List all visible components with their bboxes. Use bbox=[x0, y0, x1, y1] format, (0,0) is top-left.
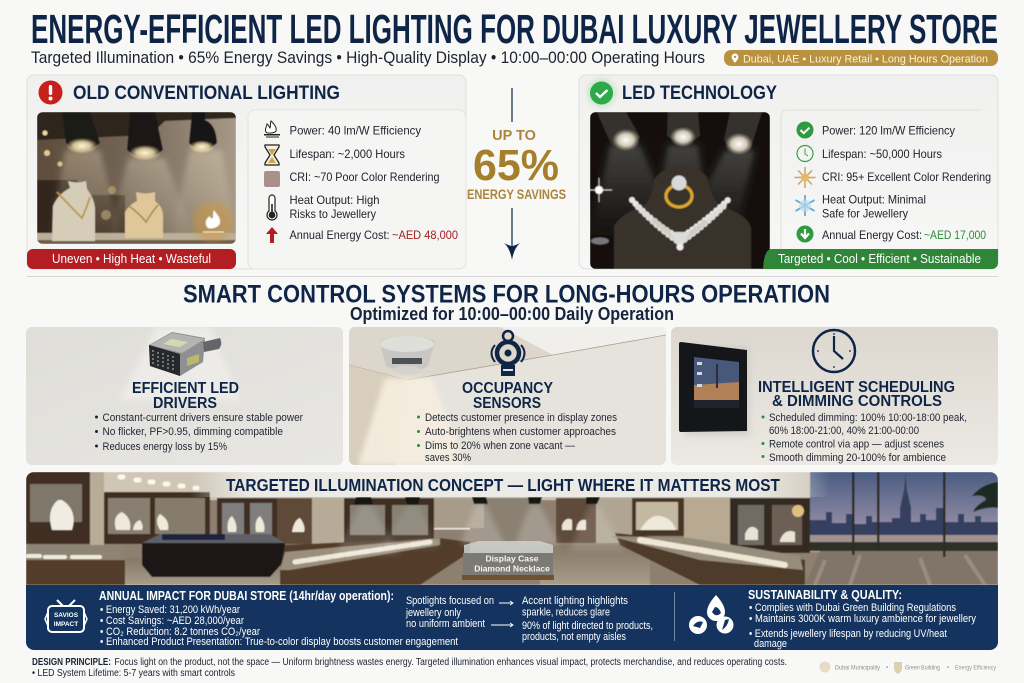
bullets: Scheduled dimming: 100% 10:00-18:00 peak, bbox=[769, 412, 967, 424]
heat output bbox=[822, 192, 926, 220]
annual cost bbox=[290, 228, 458, 242]
savings callout: UP TO bbox=[492, 128, 536, 144]
icon: savings impact badge bbox=[45, 600, 87, 632]
arrows bbox=[491, 601, 513, 627]
sustainability list: SUSTAINABILITY & QUALITY: bbox=[748, 587, 902, 602]
annual cost: Annual Energy Cost: bbox=[290, 228, 390, 242]
card: efficient LED drivers bbox=[26, 327, 343, 465]
icon: thermometer bbox=[267, 195, 277, 220]
lifespan: Lifespan: ~2,000 Hours bbox=[290, 147, 405, 161]
annual cost: Annual Energy Cost: bbox=[822, 228, 922, 242]
panel: old conventional lighting bbox=[27, 75, 466, 269]
icon: snowflake bbox=[796, 195, 814, 216]
icon: ceiling sensor bbox=[380, 336, 435, 374]
lifespan: Lifespan: ~50,000 Hours bbox=[822, 147, 942, 161]
spotlight note: jewellery only bbox=[405, 607, 461, 619]
status band: Targeted • Cool • Efficient • Sustainable bbox=[778, 252, 981, 266]
section heading: SMART CONTROL SYSTEMS FOR LONG-HOURS OPERATION bbox=[183, 280, 830, 308]
bullets bbox=[762, 412, 967, 464]
heat output: Safe for Jewellery bbox=[822, 206, 908, 220]
bullets bbox=[417, 412, 617, 464]
card: intelligent scheduling bbox=[671, 327, 998, 465]
certification logos: • bbox=[947, 664, 950, 672]
icon: savings impact badge: SAVIOS bbox=[54, 612, 79, 619]
bullets: Reduces energy loss by 15% bbox=[102, 441, 227, 453]
status band bbox=[27, 249, 236, 269]
icon: savings impact badge: IMPACT bbox=[54, 621, 78, 628]
heat output: Heat Output: High bbox=[290, 193, 380, 207]
annual cost: ~AED 48,000 bbox=[392, 228, 458, 242]
card title: SENSORS bbox=[473, 395, 541, 412]
icon: up arrow bbox=[266, 227, 278, 243]
accent note: products, not empty aisles bbox=[522, 631, 626, 643]
power: Power: 40 lm/W Efficiency bbox=[290, 124, 421, 138]
annual cost bbox=[822, 228, 986, 242]
location pill bbox=[724, 50, 998, 66]
accent note bbox=[522, 595, 653, 643]
icon: occupancy person bbox=[492, 331, 524, 376]
icon: colour swatch bbox=[264, 171, 280, 187]
card title: INTELLIGENT SCHEDULING bbox=[758, 379, 955, 396]
subtitle: Targeted Illumination • 65% Energy Savings • High-Quality Display • 10:00–00:00 Operating Hours bbox=[31, 49, 705, 67]
CRI: CRI: 95+ Excellent Color Rendering bbox=[822, 170, 991, 184]
design principle note: DESIGN PRINCIPLE: bbox=[32, 657, 111, 668]
bullets: saves 30% bbox=[425, 452, 471, 464]
photo: jewellery store interior bbox=[26, 472, 998, 585]
sustainability list: damage bbox=[754, 638, 787, 650]
bullets: Auto-brightens when customer approaches bbox=[425, 426, 616, 438]
bullets: 60% 18:00-21:00, 40% 21:00-00:00 bbox=[769, 425, 919, 437]
CRI: CRI: ~70 Poor Color Rendering bbox=[290, 170, 440, 184]
heading band: targeted illumination: TARGETED ILLUMINATION CONCEPT — LIGHT WHERE IT MATTERS MOST bbox=[226, 475, 780, 495]
spec list bbox=[781, 110, 991, 249]
sustainability list: • Complies with Dubai Green Building Regulations bbox=[749, 602, 956, 614]
annual impact list: • Enhanced Product Presentation: True-to-color display boosts customer engagement bbox=[100, 636, 458, 648]
spotlight note: no uniform ambient bbox=[406, 618, 485, 630]
spec list bbox=[248, 110, 466, 269]
bullets: Smooth dimming 20-100% for ambience bbox=[769, 452, 946, 464]
certification logos: Dubai Municipality bbox=[835, 664, 881, 672]
heading: LED TECHNOLOGY bbox=[622, 82, 777, 104]
bullets bbox=[95, 412, 303, 453]
card title: OCCUPANCY bbox=[462, 380, 554, 397]
card title bbox=[462, 380, 554, 412]
icon: flame bbox=[264, 121, 280, 138]
section subheading: Optimized for 10:00–00:00 Daily Operation bbox=[350, 304, 674, 324]
heading: OLD CONVENTIONAL LIGHTING bbox=[73, 82, 340, 104]
display case label bbox=[462, 541, 554, 580]
accent note: Accent lighting highlights bbox=[522, 595, 628, 607]
location pill: Dubai, UAE • Luxury Retail • Long Hours Operation bbox=[743, 54, 988, 66]
heat output bbox=[290, 193, 380, 221]
design principle note: • LED System Lifetime: 5-7 years with smart controls bbox=[32, 668, 235, 679]
icon: check bbox=[588, 79, 616, 107]
design principle note: Focus light on the product, not the space — Uniform brightness wastes energy. Targeted illumination enhances visual impact, protects merchandise, and reduces operating costs. bbox=[114, 657, 787, 668]
accent note: sparkle, reduces glare bbox=[522, 606, 610, 618]
design principle note bbox=[32, 657, 787, 679]
icon: hourglass bbox=[265, 145, 279, 165]
certification logos: • bbox=[886, 664, 889, 672]
sustainability list: • Extends jewellery lifespan by reducing UV/heat bbox=[749, 628, 947, 640]
annual impact list: • Cost Savings: ~AED 28,000/year bbox=[100, 615, 244, 627]
icon: clock bbox=[797, 146, 813, 162]
icon: LED driver bbox=[149, 332, 221, 376]
annual cost: ~AED 17,000 bbox=[924, 228, 986, 242]
bullets: Constant-current drivers ensure stable power bbox=[102, 412, 303, 424]
annual impact list: • Energy Saved: 31,200 kWh/year bbox=[100, 604, 240, 616]
icon: sparkle bbox=[794, 167, 816, 188]
sustainability list bbox=[748, 587, 976, 650]
spotlight note: Spotlights focused on bbox=[406, 595, 494, 607]
card title: & DIMMING CONTROLS bbox=[772, 393, 942, 410]
panel: LED technology bbox=[579, 75, 998, 269]
status band bbox=[763, 249, 998, 269]
savings callout bbox=[467, 88, 566, 260]
icon: sustainability drops bbox=[689, 595, 734, 634]
photo: LED spotlights on diamond necklace bbox=[586, 112, 770, 269]
annual impact list bbox=[99, 588, 458, 648]
certification logos: Energy Efficiency bbox=[955, 664, 997, 672]
icon: warning bbox=[38, 80, 62, 104]
panel: annual impact band bbox=[26, 585, 998, 650]
annual impact list: ANNUAL IMPACT FOR DUBAI STORE (14hr/day operation): bbox=[99, 588, 394, 603]
bullets: No flicker, PF>0.95, dimming compatible bbox=[102, 426, 283, 438]
icon: down arrow bbox=[796, 226, 814, 242]
card: occupancy sensors bbox=[349, 327, 666, 465]
accent note: 90% of light directed to products, bbox=[522, 620, 653, 632]
bullets: Dims to 20% when zone vacant — bbox=[425, 440, 575, 452]
heat output: Heat Output: Minimal bbox=[822, 192, 926, 206]
card title bbox=[758, 379, 955, 410]
savings callout: ENERGY SAVINGS bbox=[467, 187, 566, 202]
certification logos bbox=[820, 662, 997, 674]
sustainability list: • Maintains 3000K warm luxury ambience for jewellery bbox=[749, 613, 976, 625]
spotlight note bbox=[405, 595, 494, 630]
icon: wall control panel bbox=[679, 342, 750, 436]
heat output: Risks to Jewellery bbox=[290, 207, 376, 221]
power: Power: 120 lm/W Efficiency bbox=[822, 124, 955, 138]
icon: check bbox=[796, 122, 814, 138]
card title bbox=[132, 380, 239, 412]
status band: Uneven • High Heat • Wasteful bbox=[52, 252, 211, 266]
icon: clock bbox=[813, 330, 855, 372]
annual impact list: • CO₂ Reduction: 8.2 tonnes CO₂/year bbox=[100, 626, 260, 638]
certification logos: Green Building bbox=[905, 664, 940, 672]
display case label: Diamond Necklace bbox=[474, 564, 550, 574]
bullets: Remote control via app — adjust scenes bbox=[769, 438, 944, 450]
bullets: Detects customer presence in display zones bbox=[425, 412, 617, 424]
display case label: Display Case bbox=[486, 554, 539, 564]
card title: EFFICIENT LED bbox=[132, 380, 239, 397]
photo: old spotlights over jewellery busts bbox=[37, 112, 236, 244]
savings callout: 65% bbox=[473, 141, 559, 190]
card title: DRIVERS bbox=[153, 395, 217, 412]
